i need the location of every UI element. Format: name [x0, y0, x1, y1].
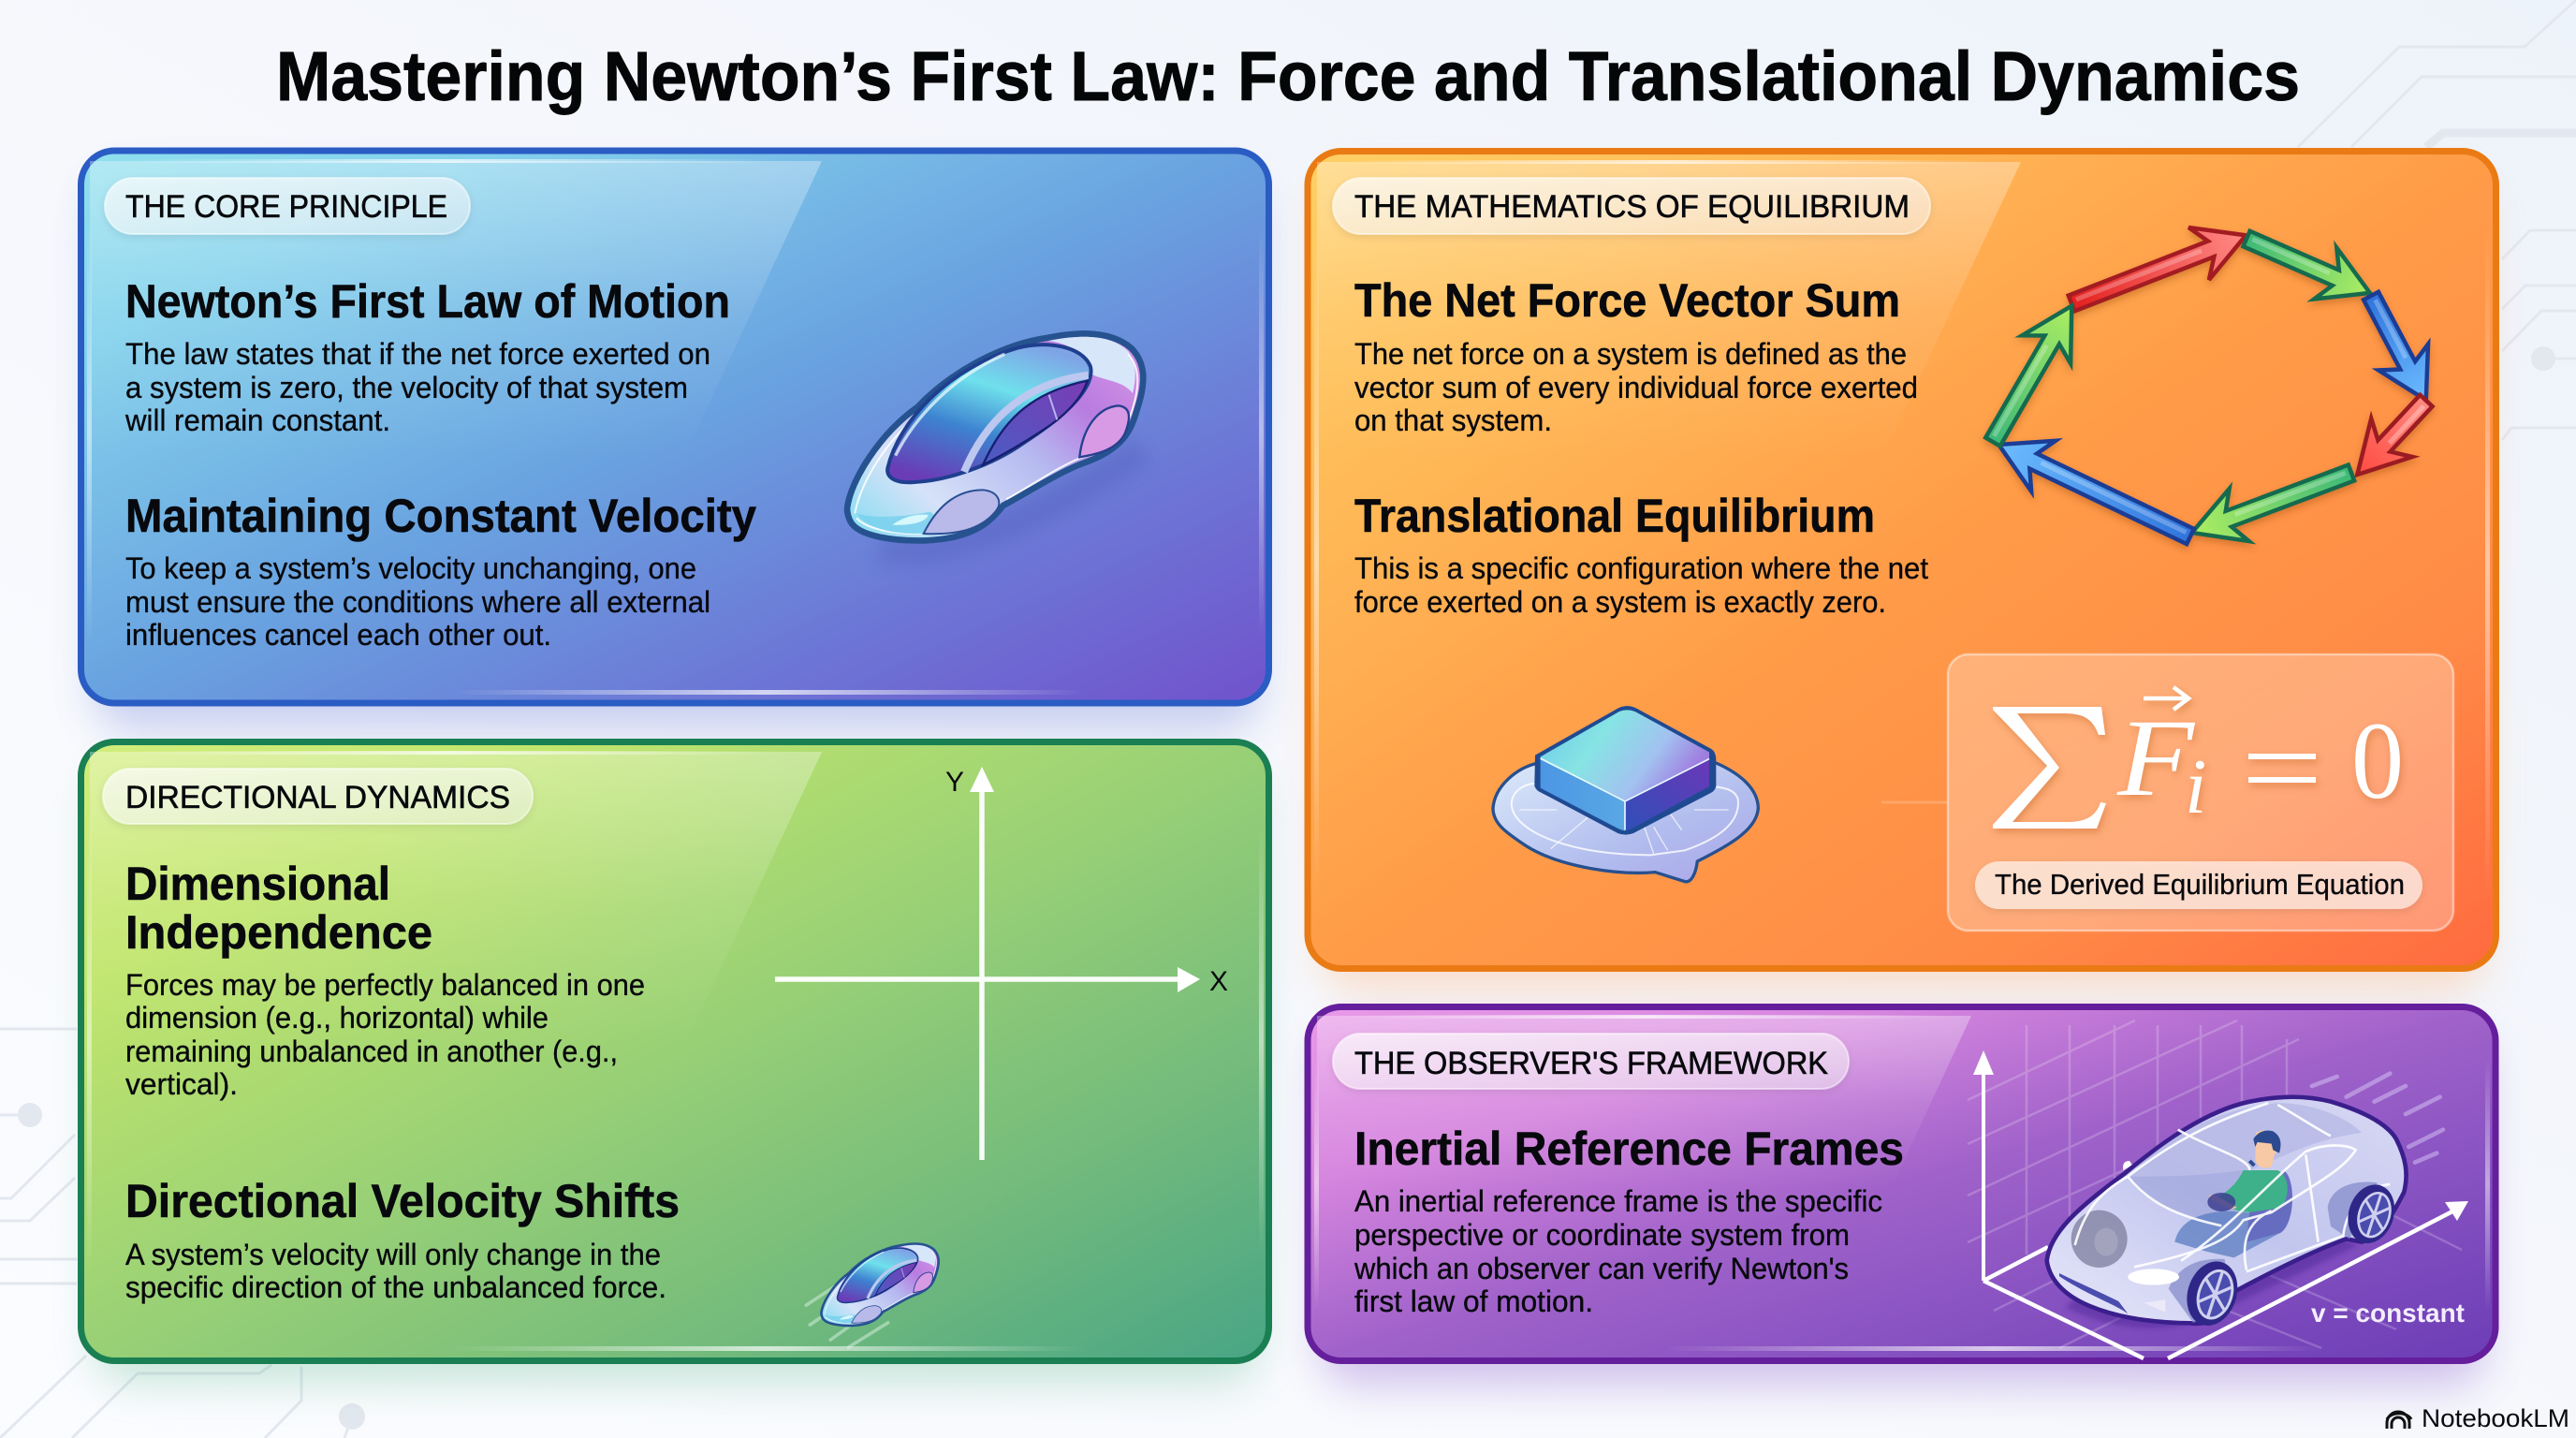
text block: inertial frames: perspective or coordinate system from — [1354, 1218, 1850, 1252]
heading: Directional Velocity Shifts: Directional Velocity Shifts — [125, 1175, 680, 1227]
text block: dimensional independence: dimension (e.g., horizontal) while — [125, 1001, 549, 1034]
heading: Dimensional Independence: Dimensional — [125, 858, 390, 910]
label: v = constant: v = constant — [2311, 1299, 2465, 1328]
text block: inertial frames: first law of motion. — [1354, 1284, 1593, 1318]
chart: XY axes: Y — [945, 767, 964, 798]
text block: net force: on that system. — [1354, 404, 1552, 437]
icon: glass car — [847, 333, 1143, 550]
heading: Translational Equilibrium: Translational Equilibrium — [1354, 490, 1875, 542]
text block: keeping velocity: To keep a system’s velocity unchanging, one — [125, 551, 696, 585]
chart: XY axes — [775, 767, 1228, 1160]
text block: velocity shifts — [125, 1238, 666, 1304]
heading: Inertial Reference Frames: Inertial Reference Frames — [1354, 1123, 1904, 1175]
heading: The Net Force Vector Sum: The Net Force Vector Sum — [1354, 274, 1900, 327]
equation card — [1948, 654, 2453, 931]
text block: keeping velocity: must ensure the conditions where all external — [125, 585, 710, 619]
section tag: THE CORE PRINCIPLE — [125, 189, 447, 225]
chart: reference frame grid and axes — [1968, 1020, 2468, 1358]
text block: inertial frames — [1354, 1184, 1882, 1318]
arrow: red vector — [2061, 209, 2256, 330]
caption — [1975, 861, 2422, 909]
section tag: DIRECTIONAL DYNAMICS — [125, 780, 510, 815]
chart: XY axes: X — [1209, 966, 1228, 997]
arrow: green vector top — [2235, 213, 2381, 318]
text block: translational equilibrium — [1354, 551, 1928, 619]
text block: dimensional independence: vertical). — [125, 1067, 238, 1101]
text block: inertial frames: An inertial reference frame is the specific — [1354, 1184, 1882, 1218]
panel: directional dynamics — [80, 741, 1269, 1384]
text block: velocity shifts: A system’s velocity will only change in the — [125, 1238, 661, 1271]
equation: i — [2185, 743, 2206, 830]
icon: transparent car with driver — [2047, 1074, 2443, 1332]
text block: net force — [1354, 337, 1918, 437]
text block: translational equilibrium: This is a specific configuration where the net — [1354, 551, 1928, 585]
heading: Newton's First Law of Motion: Newton’s First Law of Motion — [125, 275, 730, 328]
text block: inertial frames: which an observer can verify Newton's — [1354, 1252, 1849, 1285]
section tag — [1333, 1034, 1849, 1089]
arrow: blue vector bottom — [1986, 419, 2203, 562]
text block: law statement — [124, 337, 710, 437]
text block: translational equilibrium: force exerted on a system is exactly zero. — [1354, 585, 1886, 619]
heading: Maintaining Constant Velocity: Maintaining Constant Velocity — [125, 490, 756, 542]
text block: net force: The net force on a system is defined as the — [1354, 337, 1907, 371]
text block: keeping velocity — [125, 551, 710, 652]
text block: law statement: a system is zero, the velocity of that system — [125, 371, 688, 404]
section tag: THE OBSERVER'S FRAMEWORK — [1354, 1046, 1828, 1081]
text block: net force: vector sum of every individual force exerted — [1354, 371, 1918, 404]
text block: law statement: The law states that if the net force exerted on — [125, 337, 710, 371]
text block: dimensional independence: remaining unbalanced in another (e.g., — [125, 1034, 618, 1068]
text block: dimensional independence: Forces may be perfectly balanced in one — [125, 968, 645, 1002]
arrow: blue vector right — [2346, 283, 2451, 413]
chart: closed vector polygon — [1969, 209, 2451, 562]
text block: keeping velocity: influences cancel each other out. — [125, 618, 551, 652]
heading: Dimensional Independence — [125, 858, 432, 959]
arrow: green vector left — [1969, 292, 2096, 456]
equation: F — [2116, 697, 2196, 819]
heading: Dimensional Independence: Independence — [125, 906, 432, 959]
section tag — [1333, 178, 1930, 234]
icon: small moving car — [805, 1243, 939, 1348]
title: Mastering Newton’s First Law: Force and Translational Dynamics — [276, 37, 2300, 115]
section tag — [103, 769, 533, 824]
equation — [1993, 687, 2404, 830]
arrow: green vector bottom — [2182, 447, 2362, 559]
panel: the mathematics of equilibrium — [1308, 152, 2496, 992]
panel: the observer's framework — [1308, 1007, 2496, 1386]
caption: The Derived Equilibrium Equation — [1995, 868, 2405, 901]
section tag — [105, 178, 470, 234]
section tag: THE MATHEMATICS OF EQUILIBRIUM — [1354, 189, 1910, 225]
text block: dimensional independence — [125, 968, 645, 1101]
brand mark: NotebookLM: NotebookLM — [2422, 1404, 2569, 1432]
panel: the core principle — [80, 151, 1269, 730]
text block: law statement: will remain constant. — [124, 404, 390, 437]
icon: glass block on plate — [1493, 706, 1758, 882]
arrow: red vector right — [2336, 382, 2447, 493]
equation: 0 — [2351, 699, 2404, 822]
text block: velocity shifts: specific direction of the unbalanced force. — [125, 1270, 666, 1304]
